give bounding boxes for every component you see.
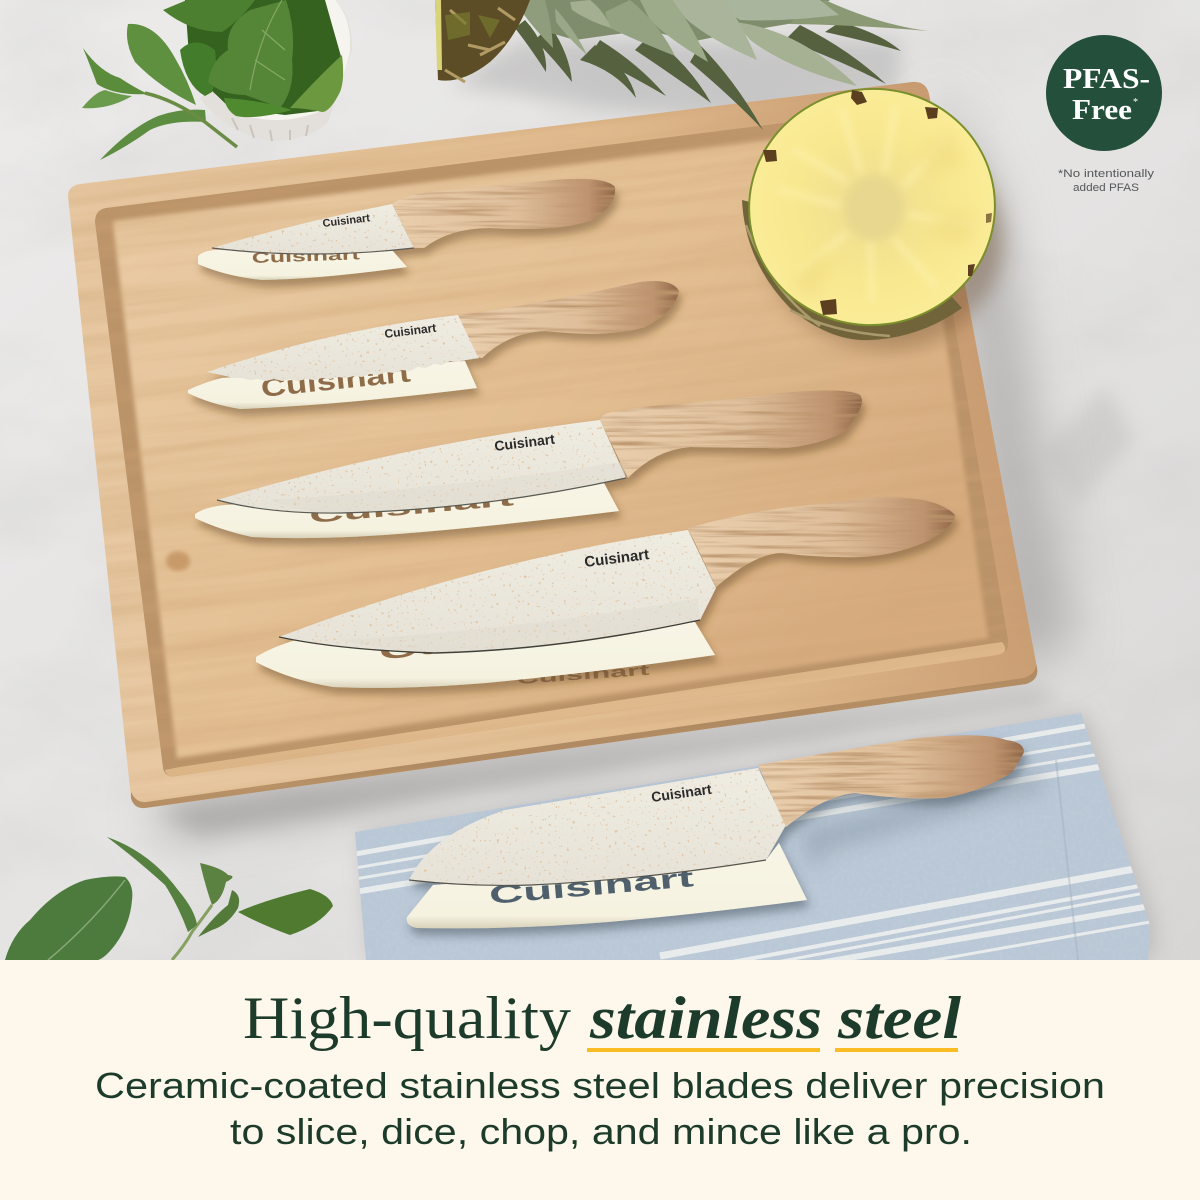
board groove (95, 106, 1008, 776)
ramekin (200, 0, 352, 141)
sheath (188, 361, 477, 409)
blade (217, 420, 626, 513)
handle (758, 735, 1024, 827)
towel (355, 710, 1159, 960)
cutting board (68, 82, 1038, 808)
blade (279, 530, 716, 653)
heading: steel (837, 985, 961, 1051)
PFAS footnote (1058, 168, 1155, 194)
board side thickness (131, 664, 1037, 808)
logo: Cuisinart (493, 431, 556, 454)
handle (458, 281, 679, 358)
PFAS-free badge: PFAS- (1063, 63, 1150, 95)
sheath (195, 483, 619, 538)
pineapple slice (733, 72, 1011, 348)
sheath (407, 843, 807, 928)
blade (212, 204, 414, 254)
knife 1: paring knife (198, 179, 615, 280)
knife 5: santoku on towel: Cuisinart (488, 862, 695, 910)
logo: Cuisinart (650, 781, 713, 805)
ramekin with mint (82, 0, 352, 160)
bottom caption panel (0, 960, 1200, 1200)
knife 2: serrated utility knife (188, 281, 679, 409)
logo: Cuisinart (384, 321, 437, 341)
blade (207, 315, 479, 381)
wood knot (166, 551, 190, 571)
body copy: to slice, dice, chop, and mince like a pro. (230, 1111, 972, 1152)
pineapple flesh (733, 72, 1011, 342)
PFAS footnote: *No intentionally (1058, 168, 1155, 180)
pineapple top with leaves (435, 0, 928, 130)
leaf mass backing (515, 0, 830, 42)
knife 3: chef's knife: Cuisinart (308, 485, 516, 528)
thin dark leaves (515, 20, 901, 130)
pineapple flesh rays (780, 108, 970, 300)
towel stripes (355, 726, 1150, 968)
body copy: Ceramic-coated stainless steel blades deliver precision (95, 1065, 1105, 1106)
logo: Cuisinart (322, 212, 371, 230)
board floor (113, 122, 988, 758)
blade (409, 768, 786, 885)
logo: Cuisinart (583, 546, 650, 571)
pineapple body (435, 0, 530, 81)
groove lit lower slope (165, 642, 1005, 776)
PFAS footnote: added PFAS (1073, 182, 1139, 194)
heading: stainless (589, 985, 822, 1051)
mint sprig bottom left (5, 837, 333, 960)
knife 5: santoku on towel (407, 735, 1024, 928)
heading: High-quality (243, 985, 571, 1051)
shadow lettering on board under knife 4: Cuisinart (516, 662, 650, 688)
PFAS-free badge: Free (1072, 94, 1132, 126)
slice shadow (767, 132, 1003, 348)
blade bevel (270, 462, 626, 513)
heading (243, 985, 961, 1051)
pineapple rind (742, 200, 962, 340)
broad pale leaves (790, 0, 928, 31)
heading underlines (587, 1048, 958, 1052)
blade bevel (340, 598, 700, 653)
shadows on marble (150, 40, 1075, 840)
knife 2: serrated utility knife: Cuisinart (259, 357, 412, 403)
sheath (198, 250, 407, 280)
PFAS-free badge (1046, 35, 1162, 151)
knife 3: chef's knife (195, 391, 862, 538)
knife 4: large chef's knife: Cuisinart (377, 611, 609, 666)
knife 1: paring knife: Cuisinart (252, 246, 360, 267)
PFAS-free badge: * (1133, 97, 1138, 108)
mint leaves in bowl (180, 42, 216, 96)
handle (600, 391, 862, 478)
sheath (256, 622, 715, 688)
handle (688, 497, 955, 587)
mint sprig left (127, 24, 196, 105)
knife 4: large chef's knife (256, 497, 955, 688)
pineapple darker segments (790, 130, 975, 300)
pineapple eyes (763, 90, 992, 315)
pineapple core (844, 175, 904, 241)
marble background (0, 0, 1200, 960)
body copy (95, 1065, 1105, 1152)
handle (392, 179, 615, 248)
mint leaf mass backing (185, 0, 342, 115)
